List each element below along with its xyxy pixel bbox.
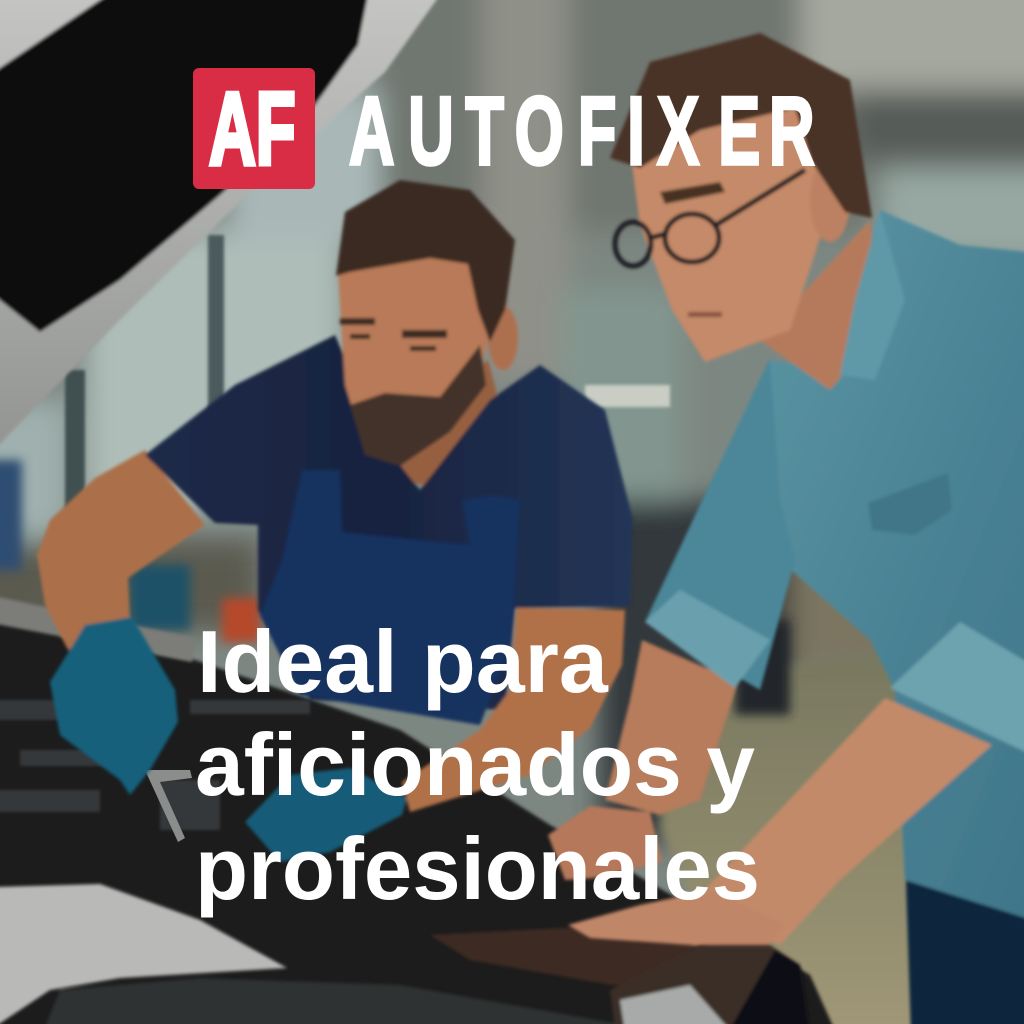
customer face [630,100,822,362]
mechanic ear [488,306,518,370]
customer collar [840,210,905,380]
mechanic apron [260,470,520,725]
customer in denim shirt [548,33,1024,1024]
car front bodywork [0,884,815,1024]
mechanic left arm [37,450,205,650]
logo red badge [193,68,315,189]
mechanic polo shirt [145,335,633,710]
headline: Ideal para [197,612,609,711]
headlight [30,978,640,1024]
mechanic neck [385,360,505,490]
mechanic right glove [245,768,407,862]
mechanic left glove [50,617,178,795]
customer neck [760,220,880,390]
mechanic right forearm [402,608,625,812]
brand name: AUTOFIXER [349,77,814,185]
customer left sleeve [645,358,795,690]
headline: profesionales [195,819,760,918]
customer mouth [688,312,722,317]
mechanic face [338,252,488,465]
customer left hand [548,806,662,880]
customer chest pocket [868,473,952,535]
car engine bay [0,589,850,1024]
customer eyebrow [660,182,725,204]
customer ear [810,158,850,242]
customer right hand [568,890,785,958]
mechanic in navy polo and apron [37,180,633,862]
customer glasses [615,170,805,266]
customer left forearm [605,640,738,815]
customer right forearm [700,698,992,945]
customer shirt body [770,210,1024,930]
logo initials: AF [209,72,296,187]
mechanic eyes [340,318,447,351]
silver bumper [0,884,287,1024]
customer left cuff [645,590,770,688]
customer hair [610,33,872,218]
mechanic hair [336,180,515,342]
mechanic beard [350,345,486,466]
right fender [610,945,815,1024]
headline: aficionados y [195,715,755,814]
customer right cuff [890,622,1024,770]
car hood, raised [0,0,465,485]
logo [193,68,315,189]
customer trousers [905,850,1024,1024]
